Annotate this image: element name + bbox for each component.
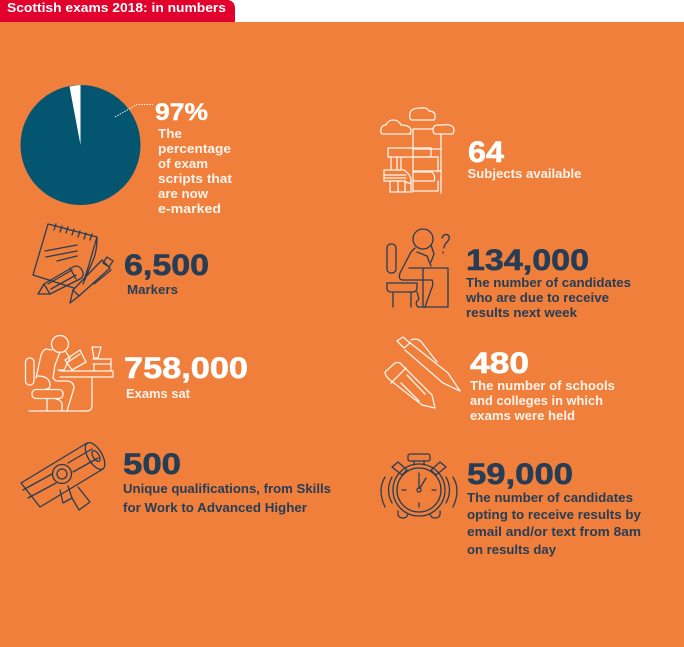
stat: 758,000 exams sat: Exams sat <box>126 386 191 401</box>
stat: 134,000 candidates: 134,000 <box>466 244 589 277</box>
stat: 97%: percentage <box>158 141 231 156</box>
stat: 97%: e-marked <box>158 201 221 216</box>
stat: 59,000 candidates: The number of candidates <box>467 490 633 505</box>
icon: alarm clock <box>381 454 457 518</box>
stat: 480 schools: 480 <box>470 347 529 380</box>
title tab: Scottish exams 2018: in numbers <box>7 0 226 15</box>
icon: pen and pencil <box>385 337 460 408</box>
pie chart: 97% <box>20 85 153 205</box>
stat: 97%: of exam <box>158 156 208 171</box>
icon: thinking student <box>387 229 449 307</box>
stat: 134,000 candidates <box>465 244 631 320</box>
title tab <box>0 0 235 22</box>
stat: 500 qualifications <box>123 448 331 515</box>
stat: 6,500 markers: 6,500 <box>124 249 209 282</box>
stat: 64 subjects: 64 <box>468 136 504 169</box>
stat: 500 qualifications: 500 <box>123 448 181 481</box>
stat: 500 qualifications: Unique qualifications, from Skills <box>123 481 331 496</box>
stat: 134,000 candidates: results next week <box>466 305 578 320</box>
stat: 64 subjects: Subjects available <box>468 166 582 181</box>
stat: 64 subjects <box>468 136 582 181</box>
stat: 97%: 97% <box>155 99 208 126</box>
stat: 59,000 candidates: opting to receive results by <box>467 507 642 522</box>
stat: 59,000 candidates <box>467 458 642 557</box>
icon: books and clouds <box>381 108 454 193</box>
icon: diploma scroll <box>21 440 109 510</box>
stat: 134,000 candidates: The number of candidates <box>466 275 631 290</box>
stat: 6,500 markers: Markers <box>127 282 178 297</box>
icon: student at desk <box>26 336 113 411</box>
stat: 59,000 candidates: on results day <box>467 542 557 557</box>
stat: 6,500 markers <box>124 249 209 297</box>
stat: 500 qualifications: for Work to Advanced Higher <box>123 500 307 515</box>
stat: 134,000 candidates: who are due to receive <box>465 290 609 305</box>
stat: 480 schools: and colleges in which <box>470 393 603 408</box>
icon: notebook, pencil and pen <box>33 224 113 303</box>
stat: 97%: scripts that <box>158 171 233 186</box>
stat: 59,000 candidates: email and/or text from 8am <box>467 524 641 539</box>
stat: 480 schools: exams were held <box>470 408 575 423</box>
stat: 480 schools: The number of schools <box>470 378 615 393</box>
stat: 758,000 exams sat: 758,000 <box>124 352 248 385</box>
stat: 97%: The <box>158 126 182 141</box>
stat: 97%: are now <box>158 186 209 201</box>
stat: 480 schools <box>470 347 615 423</box>
stat: 59,000 candidates: 59,000 <box>467 458 573 491</box>
stat: 97% <box>155 99 233 216</box>
stat: 758,000 exams sat <box>124 352 248 401</box>
